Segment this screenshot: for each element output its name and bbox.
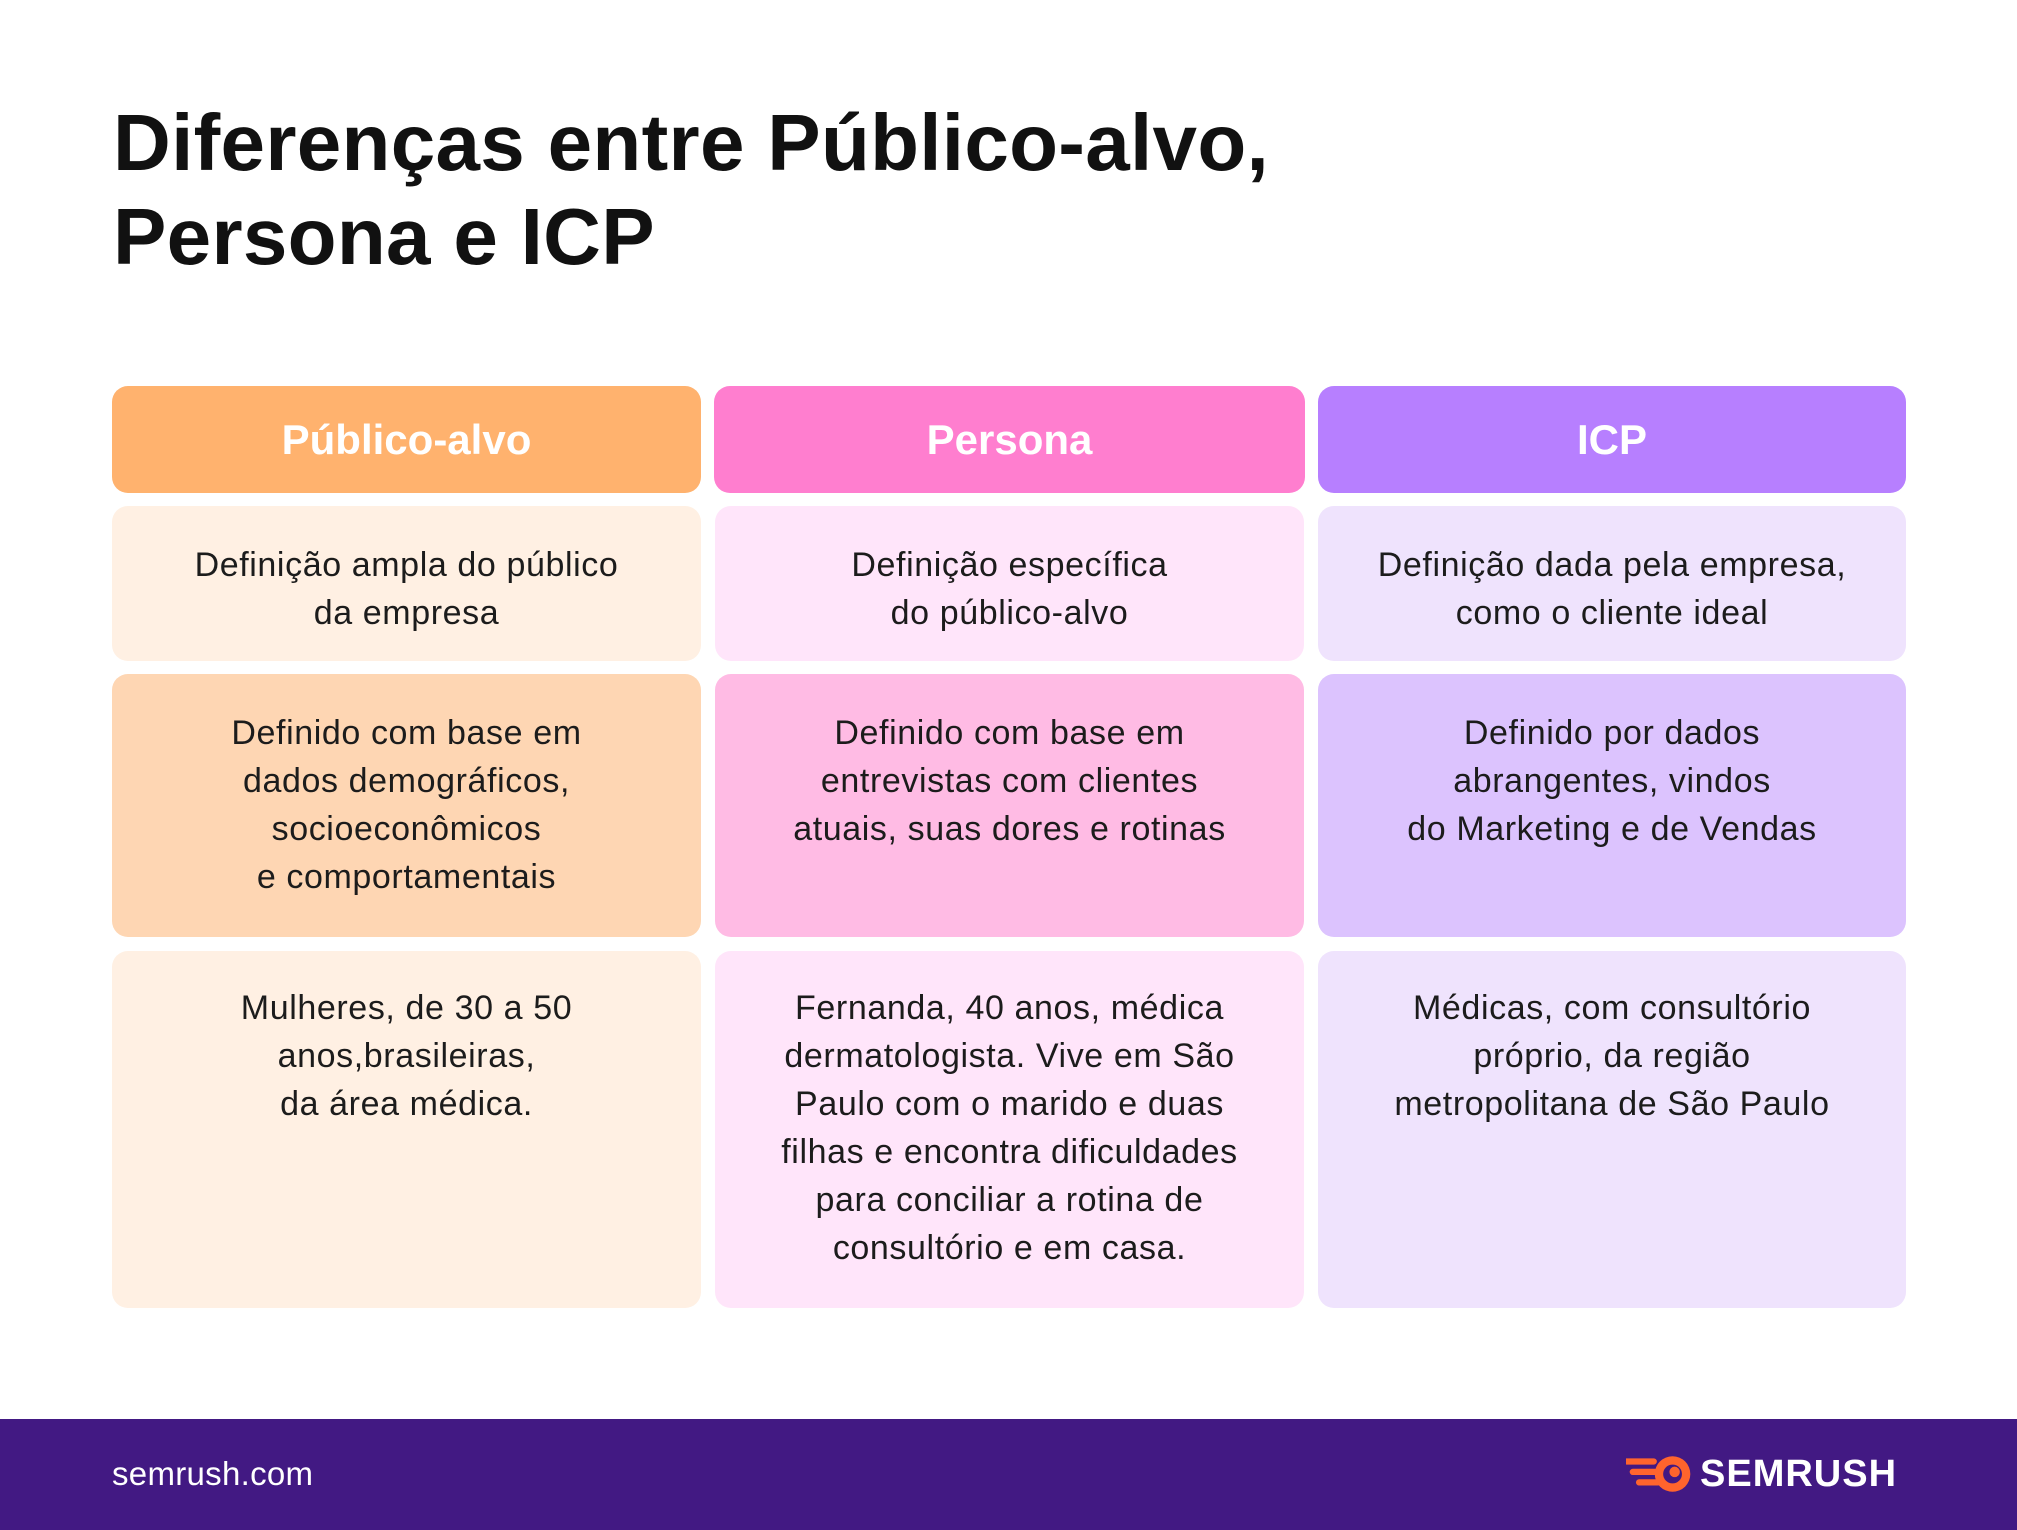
cell: icp exemplo: metropolitana de São Paulo xyxy=(1394,1085,1830,1123)
cell: persona definição: do público-alvo xyxy=(891,594,1128,632)
cell: persona definição: Definição específica xyxy=(851,546,1168,584)
title: Diferenças entre Público-alvo, xyxy=(113,98,1269,187)
cell: público-alvo base xyxy=(112,674,701,937)
cell: persona exemplo xyxy=(715,951,1304,1308)
header: Público-alvo xyxy=(112,386,701,493)
cell: icp exemplo: Médicas, com consultório xyxy=(1413,989,1811,1027)
cell: persona base: entrevistas com clientes xyxy=(821,762,1198,800)
cell: icp exemplo: próprio, da região xyxy=(1473,1037,1751,1075)
cell: público-alvo base: socioeconômicos xyxy=(272,810,541,848)
header: Persona xyxy=(714,386,1305,493)
cell: persona exemplo: consultório e em casa. xyxy=(833,1229,1186,1267)
cell: público-alvo definição: Definição ampla do público xyxy=(195,546,618,584)
cell: público-alvo definição: da empresa xyxy=(314,594,499,632)
cell: público-alvo exemplo xyxy=(112,951,701,1308)
cell: persona exemplo: filhas e encontra dificuldades xyxy=(781,1133,1238,1171)
cell: persona base xyxy=(715,674,1304,937)
cell: icp base: do Marketing e de Vendas xyxy=(1407,810,1817,848)
title: Persona e ICP xyxy=(113,192,655,281)
cell: persona exemplo: dermatologista. Vive em São xyxy=(784,1037,1235,1075)
cell: icp base: Definido por dados xyxy=(1464,714,1760,752)
cell: público-alvo base: Definido com base em xyxy=(231,714,582,752)
cell: icp base xyxy=(1318,674,1906,937)
header: ICP xyxy=(1318,386,1906,493)
logo: semrush: SEMRUSH xyxy=(1700,1452,1897,1494)
cell: icp definição xyxy=(1318,506,1906,661)
cell: persona definição xyxy=(715,506,1304,661)
title xyxy=(113,98,1269,281)
header: ICP: ICP xyxy=(1577,416,1647,462)
footer xyxy=(0,1419,2017,1530)
header: Público-alvo: Público-alvo xyxy=(282,416,531,462)
cell: público-alvo exemplo: Mulheres, de 30 a 50 xyxy=(241,989,572,1027)
cell: icp definição: Definição dada pela empresa, xyxy=(1378,546,1846,584)
cell: público-alvo exemplo: anos,brasileiras, xyxy=(278,1037,535,1075)
cell: público-alvo definição xyxy=(112,506,701,661)
cell: público-alvo exemplo: da área médica. xyxy=(280,1085,533,1123)
cell: persona base: atuais, suas dores e rotinas xyxy=(793,810,1226,848)
cell: persona exemplo: Paulo com o marido e duas xyxy=(795,1085,1224,1123)
cell: público-alvo base: e comportamentais xyxy=(257,858,556,896)
cell: persona base: Definido com base em xyxy=(834,714,1185,752)
cell: icp exemplo xyxy=(1318,951,1906,1308)
cell: icp definição: como o cliente ideal xyxy=(1456,594,1768,632)
cell: público-alvo base: dados demográficos, xyxy=(243,762,570,800)
footer url: semrush.com xyxy=(112,1455,313,1492)
cell: icp base: abrangentes, vindos xyxy=(1453,762,1771,800)
cell: persona exemplo: Fernanda, 40 anos, médica xyxy=(795,989,1224,1027)
header: Persona: Persona xyxy=(927,416,1092,462)
cell: persona exemplo: para conciliar a rotina de xyxy=(816,1181,1203,1219)
